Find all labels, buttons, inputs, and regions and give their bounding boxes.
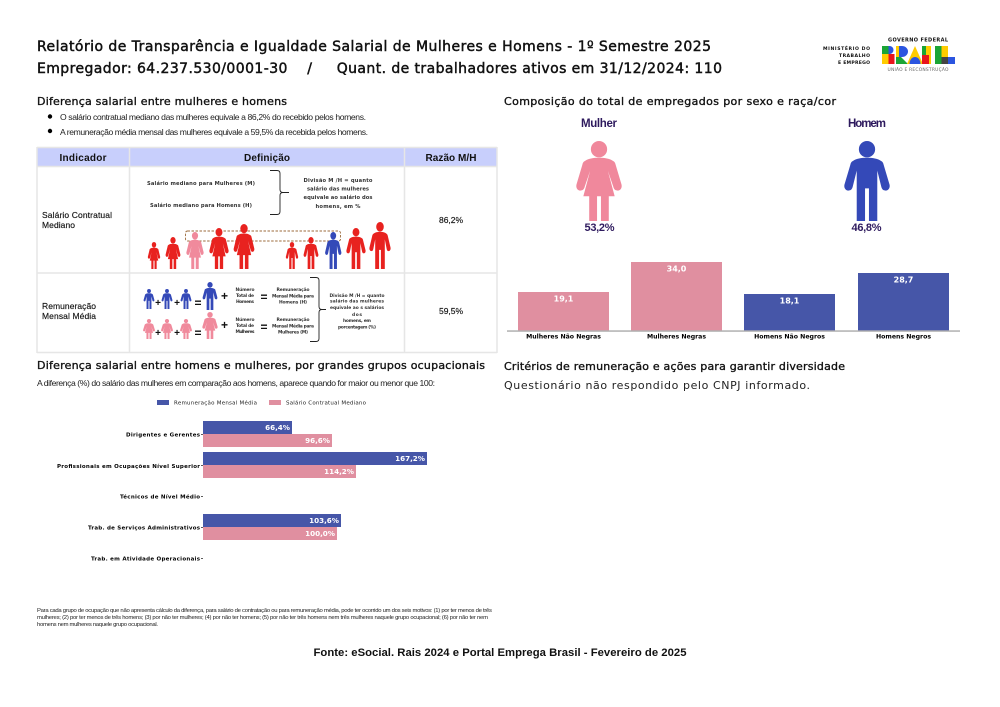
icons: mulheres por salário bbox=[148, 224, 254, 269]
text: questionário: Questionário não respondido pelo CNPJ informado. bbox=[504, 379, 810, 392]
bar: mulheres não negras bbox=[518, 292, 609, 340]
definition text: salário mediano: Salário mediano para Mulheres (M) bbox=[147, 180, 255, 187]
definition text: remuneração: Mensal Média para bbox=[272, 292, 314, 300]
group: atividade operacionais: Trab. em Atividade Operacionais bbox=[91, 556, 201, 562]
table header: Indicador bbox=[60, 153, 107, 164]
bullet list bbox=[48, 112, 368, 137]
footnote: Para cada grupo de ocupação que não apresenta cálculo da diferença, para salário de contratação ou para remuneração média, pode ter ocorrido um dos seis motivos: (1) por ter menos de três bbox=[37, 608, 492, 614]
definition text: salário mediano: equivale ao salário dos bbox=[304, 194, 372, 201]
icons: soma mulheres: + bbox=[155, 328, 161, 339]
icons: soma homens: = bbox=[194, 296, 202, 310]
group: dirigentes e gerentes: Dirigentes e Gerentes bbox=[126, 432, 201, 438]
row label: remuneração mensal média bbox=[42, 301, 96, 321]
definition text: remuneração: Mensal Média para bbox=[272, 322, 314, 330]
row label: remuneração mensal média: Mensal Média bbox=[42, 311, 96, 321]
row label: remuneração mensal média: Remuneração bbox=[42, 301, 96, 311]
definition text: remuneração: porcentagem (%) bbox=[338, 324, 376, 330]
icons: soma mulheres bbox=[143, 312, 228, 340]
text: explicação: A diferença (%) do salário das mulheres em comparação aos homens, aparece quando for maior ou menor que 100: bbox=[37, 378, 435, 388]
group: serviços administrativos: 100,0% bbox=[305, 529, 335, 538]
logo: ministério e governo federal: MINISTÉRIO DO bbox=[823, 44, 870, 52]
group: profissionais bbox=[57, 452, 427, 478]
row label: salário contratual mediano: Salário Contratual bbox=[42, 210, 112, 220]
legend: Salário Contratual Mediano bbox=[286, 400, 367, 406]
value: razão salário: 86,2% bbox=[439, 215, 463, 225]
definition text: remuneração: Mulheres bbox=[236, 329, 255, 335]
row label: salário contratual mediano bbox=[42, 210, 112, 230]
icons: soma homens: + bbox=[221, 289, 228, 303]
source: Fonte: eSocial. Rais 2024 e Portal Emprega Brasil - Fevereiro de 2025 bbox=[314, 647, 686, 659]
definition text: remuneração: = bbox=[260, 320, 268, 334]
icons: soma mulheres: + bbox=[221, 318, 228, 332]
definition text: remuneração bbox=[236, 278, 384, 342]
panel: tabela de indicadores bbox=[37, 147, 497, 353]
definition text: remuneração: equivale ao s salários bbox=[330, 304, 384, 311]
bar: mulheres negras: Mulheres Negras bbox=[647, 334, 706, 340]
group: serviços administrativos: Trab. de Serviços Administrativos bbox=[88, 526, 201, 532]
bar chart: grupos ocupacionais bbox=[57, 421, 427, 562]
definition text: remuneração: Número bbox=[236, 316, 254, 323]
definition text: remuneração: Homens (H) bbox=[279, 300, 307, 306]
bar: homens não negros: 18,1 bbox=[780, 296, 800, 306]
heading: diferença salarial: Diferença salarial entre mulheres e homens bbox=[37, 95, 287, 108]
bar: homens não negros: Homens Não Negros bbox=[754, 334, 825, 340]
logo: ministério e governo federal: GOVERNO FEDERAL bbox=[888, 38, 949, 44]
bar: mulheres não negras: Mulheres Não Negras bbox=[526, 334, 601, 340]
panel: mulher bbox=[576, 118, 622, 234]
heading: critérios: Critérios de remuneração e ações para garantir diversidade bbox=[504, 360, 845, 373]
legend bbox=[157, 400, 367, 406]
title bbox=[37, 39, 722, 77]
group: serviços administrativos: 103,6% bbox=[309, 516, 339, 525]
definition text: remuneração: Total de bbox=[236, 293, 254, 299]
panel: homem: Homem bbox=[848, 118, 886, 130]
definition text: salário mediano: Salário mediano para Homens (H) bbox=[150, 202, 252, 209]
icons: soma homens: + bbox=[155, 298, 161, 309]
definition text: salário mediano: Divisão M /H = quanto bbox=[304, 178, 373, 184]
row label: salário contratual mediano: Mediano bbox=[42, 220, 75, 230]
icons: soma homens bbox=[144, 282, 228, 310]
icons: soma mulheres: + bbox=[174, 328, 180, 339]
definition text: remuneração: dos bbox=[352, 312, 362, 318]
definition text: remuneração: = bbox=[260, 290, 268, 304]
logo: ministério e governo federal: TRABALHO bbox=[839, 53, 870, 59]
bullet list: O salário contratual mediano das mulheres equivale a 86,2% do recebido pelos homens. bbox=[60, 112, 366, 122]
panel: mulher: Mulher bbox=[581, 118, 618, 130]
group: serviços administrativos bbox=[88, 514, 341, 540]
icons: soma mulheres: = bbox=[194, 326, 202, 340]
bar: mulheres negras: 34,0 bbox=[667, 264, 687, 274]
table header: Definição bbox=[244, 153, 290, 164]
icons: homens por salário bbox=[286, 222, 391, 269]
bullet list: A remuneração média mensal das mulheres equivale a 59,5% da recebida pelos homens. bbox=[60, 127, 368, 137]
table header bbox=[37, 148, 497, 166]
group: profissionais: 167,2% bbox=[395, 454, 425, 463]
footnote: homens nem mulheres naquele grupo ocupacional. bbox=[37, 622, 158, 628]
group: dirigentes e gerentes bbox=[126, 421, 332, 447]
logo: ministério e governo federal bbox=[823, 38, 955, 73]
group: dirigentes e gerentes: 96,6% bbox=[305, 436, 330, 445]
definition text: salário mediano bbox=[147, 170, 373, 214]
footnote bbox=[37, 608, 492, 628]
bar: mulheres não negras: 19,1 bbox=[554, 294, 574, 304]
legend: Remuneração Mensal Média bbox=[174, 400, 257, 406]
definition text: salário mediano: homens, em % bbox=[316, 204, 361, 210]
group: técnicos: Técnicos de Nível Médio bbox=[120, 494, 200, 500]
group: profissionais: Profissionais em Ocupações Nível Superior bbox=[57, 463, 200, 470]
definition text: remuneração: Remuneração bbox=[276, 287, 310, 293]
bar: homens negros: Homens Negros bbox=[876, 334, 931, 340]
definition text: remuneração: Remuneração bbox=[276, 317, 310, 323]
logo: ministério e governo federal: UNIÃO E RECONSTRUÇÃO bbox=[888, 66, 949, 73]
panel: homem: 46,8% bbox=[852, 222, 882, 234]
bar: homens negros bbox=[858, 273, 949, 340]
table header: Razão M/H bbox=[426, 153, 476, 164]
dashed median box bbox=[186, 231, 340, 241]
value: razão remuneração: 59,5% bbox=[439, 306, 463, 316]
panel: homem bbox=[844, 118, 890, 234]
bar chart: sexo e raça/cor bbox=[507, 262, 960, 340]
heading: grupos ocupacionais: Diferença salarial entre homens e mulheres, por grandes grupos ocupacionais bbox=[37, 359, 485, 372]
definition text: remuneração: Homens bbox=[236, 299, 254, 305]
definition text: remuneração: Mulheres (M) bbox=[278, 330, 308, 336]
footnote: mulheres; (2) por ter menos de três homens; (3) por não ter mulheres; (4) por não ter homens; (5) por não ter três homens nem três mulheres naquele grupo ocupacional; (6) por não ter nem bbox=[37, 615, 488, 621]
bar: mulheres negras bbox=[631, 262, 722, 340]
panel: mulher: 53,2% bbox=[584, 222, 615, 234]
definition text: remuneração: Total de bbox=[236, 323, 254, 329]
title: Empregador: 64.237.530/0001-30 / Quant. de trabalhadores ativos em 31/12/2024: 110 bbox=[37, 61, 722, 77]
definition text: remuneração: Divisão M /H = quanto bbox=[330, 293, 384, 299]
logo: ministério e governo federal: E EMPREGO bbox=[838, 60, 870, 66]
definition text: remuneração: salário das mulheres bbox=[330, 298, 384, 304]
definition text: remuneração: homens, em bbox=[343, 318, 371, 324]
definition text: salário mediano: salário das mulheres bbox=[307, 186, 369, 192]
title: Relatório de Transparência e Igualdade Salarial de Mulheres e Homens - 1º Semestre 2025 bbox=[37, 39, 711, 55]
heading: composição: Composição do total de empregados por sexo e raça/cor bbox=[504, 95, 836, 108]
icons: soma homens: + bbox=[174, 298, 180, 309]
bar: homens não negros bbox=[744, 294, 835, 340]
group: profissionais: 114,2% bbox=[324, 467, 354, 476]
group: dirigentes e gerentes: 66,4% bbox=[265, 423, 290, 432]
definition text: remuneração: Número bbox=[236, 286, 254, 293]
bar: homens negros: 28,7 bbox=[894, 276, 913, 284]
